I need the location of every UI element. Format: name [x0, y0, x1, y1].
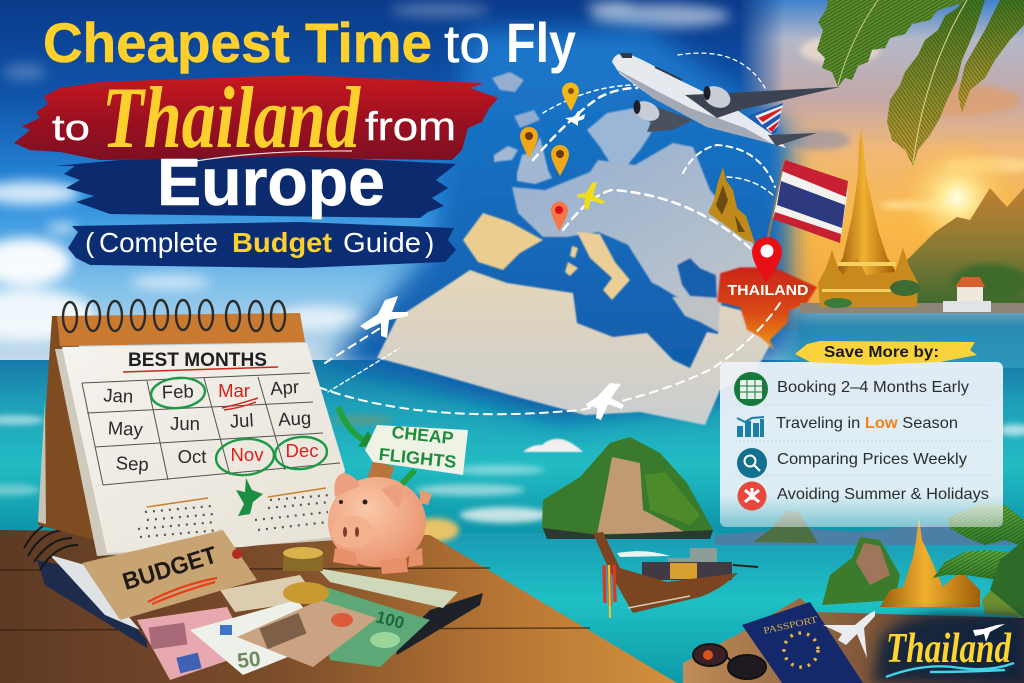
map: location label: THAILAND — [728, 283, 808, 299]
row: booking — [734, 372, 969, 406]
longtail boat — [593, 532, 758, 618]
hills greenery — [952, 264, 1024, 300]
temple on map — [708, 167, 755, 243]
frond: centre — [887, 0, 985, 166]
title line one: Cheapest Time — [43, 11, 432, 74]
pig: legs — [333, 548, 423, 574]
pig: body — [328, 477, 426, 567]
icon: yellow plane — [577, 182, 605, 210]
calendar: stacked pages shadow — [55, 345, 342, 556]
map: Spain — [463, 213, 543, 270]
map: small islands — [514, 110, 540, 128]
sunglasses — [693, 644, 766, 679]
bill: pink — [137, 607, 250, 680]
flight routes — [318, 53, 780, 414]
brush: red — [14, 75, 498, 160]
plane: cockpit and livery — [621, 54, 682, 80]
map: North Africa and Arabia — [377, 270, 770, 425]
panel heading: Save More by: — [824, 344, 939, 361]
bill: tan — [237, 600, 377, 667]
pin: UK — [520, 127, 538, 158]
calendar: back stand — [38, 316, 105, 552]
title block: to — [444, 15, 490, 74]
map: Italy — [577, 232, 630, 300]
frond: middle — [933, 550, 1024, 580]
budget tag: BUDGET — [119, 542, 220, 596]
mountains — [905, 188, 1024, 305]
bill: pale green top — [317, 568, 458, 608]
frond: upper — [947, 503, 1024, 547]
map: Scandinavia — [587, 107, 653, 168]
boat: ribbons — [604, 565, 615, 606]
bill: green 100 — [313, 583, 430, 667]
title line three: Europe — [157, 145, 385, 220]
calendar: months: Apr — [269, 376, 300, 399]
clouds — [0, 1, 730, 341]
boat: cabin — [642, 562, 732, 580]
money — [137, 547, 483, 680]
icon: small white plane on route — [565, 111, 585, 126]
row: booking: Booking 2–4 Months Early — [777, 379, 969, 396]
map: Sardinia and Sicily — [565, 246, 578, 276]
calendar: months: Jun — [170, 413, 200, 434]
background: water under temple — [760, 308, 1024, 368]
pin: Germany — [551, 145, 569, 176]
subtitle: Complete — [99, 227, 218, 258]
red location pin — [752, 237, 782, 282]
calendar: months: Sep — [115, 452, 149, 475]
palm bottom right — [933, 503, 1024, 618]
background: foreground water — [0, 533, 1024, 683]
table left — [0, 530, 677, 683]
subtitle: ( — [85, 227, 95, 258]
toy plane — [823, 611, 875, 658]
panel heading — [795, 341, 977, 365]
calendar: heading: BEST MONTHS — [128, 350, 267, 371]
map: Ireland and UK — [494, 137, 552, 184]
plane: tail fin — [748, 103, 783, 135]
row: comparing prices: Comparing Prices Weekly — [777, 451, 967, 468]
plane: main wing — [685, 87, 840, 118]
calendar: red scribble — [222, 398, 258, 410]
cheap flights arrow — [338, 407, 415, 484]
map: Europe, Africa and Asia — [377, 72, 817, 425]
subtitle: Budget — [232, 227, 332, 258]
map pins — [520, 82, 579, 231]
boat: motor pole — [733, 565, 758, 567]
row: avoiding — [738, 482, 989, 510]
logo: plane — [973, 624, 1005, 642]
pig: coin in slot — [367, 460, 394, 485]
pin: yellow north — [562, 82, 579, 111]
icon: white plane left — [360, 296, 408, 338]
cheap flights sign — [365, 422, 468, 475]
map: Thailand — [717, 267, 817, 350]
row: comparing prices — [737, 448, 967, 478]
passport — [742, 602, 863, 683]
table right — [683, 598, 1024, 683]
logo: waves — [886, 663, 1014, 677]
background: sunset sky — [741, 0, 1024, 330]
plane: engines — [700, 82, 734, 112]
money: 50 — [236, 648, 262, 673]
cloud on horizon — [523, 439, 583, 452]
calendar — [38, 300, 345, 556]
boat: wake — [617, 551, 670, 557]
coins — [283, 582, 329, 604]
row dividers — [735, 405, 990, 475]
calendar: small date grids — [138, 495, 330, 537]
pig: tail — [420, 490, 432, 505]
subtitle: Guide — [343, 227, 421, 258]
save more panel — [720, 341, 1003, 527]
icon: white plane centre — [586, 383, 624, 420]
money: 100 — [374, 607, 406, 633]
airplane — [612, 53, 840, 148]
golden stupa bottom — [880, 517, 980, 607]
calendar: green arrow — [236, 478, 263, 516]
palm top right — [817, 0, 1024, 166]
island: small distant rock — [753, 510, 818, 543]
map: Turkey — [672, 297, 722, 332]
house and boats — [943, 277, 991, 312]
flag pole — [768, 158, 785, 238]
passport: PASSPORT — [763, 615, 819, 637]
brush: navy — [55, 156, 456, 218]
calendar: months: Jan — [103, 384, 134, 407]
bill: white blue — [190, 600, 330, 675]
calendar: months: Aug — [278, 407, 312, 430]
cheap flights sign: FLIGHTS — [378, 444, 457, 472]
plane: fuselage — [612, 53, 786, 148]
frond: left — [817, 0, 968, 87]
title block: from — [365, 105, 456, 149]
distant mountains — [715, 524, 1024, 545]
title block: Thailand — [102, 70, 362, 167]
row: low season — [737, 415, 958, 437]
wallet — [395, 593, 483, 655]
cheap flights sign: CHEAP — [391, 422, 455, 448]
shoreline — [800, 303, 1024, 313]
subtitle: ) — [425, 227, 434, 258]
frond: right — [958, 0, 1024, 113]
background: blue sky — [0, 0, 1024, 380]
boat: hull — [593, 532, 738, 613]
row: avoiding: Avoiding Summer & Holidays — [777, 486, 989, 503]
calendar: orange header — [57, 313, 305, 346]
title block: Fly — [506, 11, 576, 74]
title block — [14, 11, 576, 268]
brush: caption — [68, 222, 456, 268]
calendar: page — [62, 343, 345, 553]
pig: ears — [334, 473, 403, 508]
calendar: months: Feb — [161, 380, 194, 403]
map: ocean — [330, 30, 790, 420]
island: large limestone rock — [542, 437, 713, 539]
frond: lower — [982, 580, 1024, 618]
title line two: to — [52, 107, 90, 148]
budget tag — [82, 530, 257, 620]
golden pagoda — [818, 128, 920, 308]
sunset cloud streaks — [790, 36, 1024, 210]
background: sea — [0, 360, 1024, 535]
frond: dark foliage — [990, 540, 1024, 618]
Thai flag — [768, 158, 848, 243]
map: continental Europe — [512, 143, 772, 300]
calendar: months: May — [107, 417, 144, 440]
logo backdrop — [872, 614, 1024, 683]
calendar: months: Jul — [229, 409, 254, 432]
calendar: months: Oct — [178, 446, 206, 467]
calendar: months: Dec — [286, 440, 318, 461]
plane: tailplane — [768, 133, 817, 146]
map: Black Sea — [677, 258, 717, 298]
row: low season: Traveling in Low Season — [776, 415, 958, 432]
calendar: months — [103, 376, 318, 475]
calendar: green circles — [150, 376, 328, 477]
pin: France — [551, 202, 568, 231]
calendar: grid lines — [82, 373, 340, 485]
panel card — [720, 362, 1003, 527]
calendar: months: Mar — [218, 380, 250, 401]
calendar: rings — [63, 300, 285, 332]
map: Iceland — [492, 72, 524, 92]
notebook — [24, 522, 147, 648]
bill: beige back — [220, 575, 318, 612]
piggy bank — [328, 460, 432, 574]
sun glow — [895, 136, 1019, 260]
pig: snout — [331, 516, 373, 548]
sea highlights — [0, 414, 1024, 542]
calendar: months: Nov — [231, 444, 264, 465]
rock right of boat — [822, 537, 900, 605]
plane: lower wing — [647, 107, 693, 132]
title swoosh — [190, 151, 352, 162]
